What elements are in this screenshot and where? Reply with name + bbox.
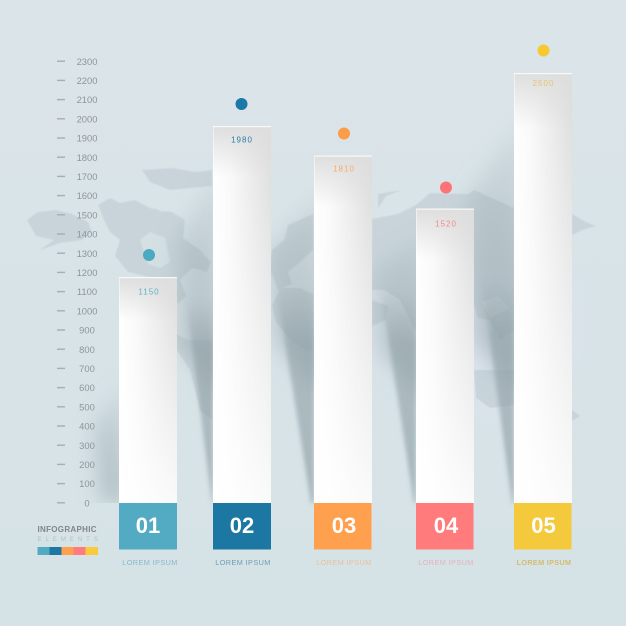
axis scale: 0 [84, 497, 90, 508]
bar 02 [213, 98, 271, 567]
map lakes and highlights [140, 196, 510, 318]
axis scale: 1500 [77, 209, 97, 220]
axis scale: 100 [79, 478, 95, 489]
bar 03 [314, 128, 372, 567]
axis scale: 1100 [77, 286, 97, 297]
axis scale: 700 [79, 363, 95, 374]
axis scale: 200 [79, 459, 95, 470]
bar 01: 1150 [138, 288, 160, 296]
infographic canvas [28, 44, 594, 565]
bar 03: LOREM IPSUM [316, 558, 372, 567]
bar 05: LOREM IPSUM [517, 558, 571, 567]
axis scale: 600 [79, 382, 95, 393]
bar 04: 1520 [435, 220, 457, 228]
bar 05: 05 [531, 513, 556, 538]
bar 05: 2500 [533, 79, 554, 88]
bar 01 [119, 249, 178, 567]
axis scale: 500 [79, 401, 95, 412]
bar 05 [514, 44, 572, 567]
axis scale: 1800 [77, 152, 97, 163]
axis scale: 1200 [77, 267, 97, 278]
axis scale: 1000 [77, 305, 97, 316]
axis scale [57, 56, 97, 508]
bar 03: 1810 [333, 164, 355, 174]
bar 02: 1980 [231, 136, 253, 144]
world map [27, 168, 596, 421]
bar 03: 03 [332, 513, 356, 538]
bar 04 [416, 182, 474, 567]
bar 02: LOREM IPSUM [215, 558, 271, 567]
bar 01: LOREM IPSUM [122, 558, 178, 567]
bar 02: 02 [230, 513, 254, 538]
logo: infographic elements [38, 525, 102, 555]
logo: infographic elements: ELEMENTS [38, 537, 102, 543]
axis scale: 2300 [77, 56, 97, 67]
axis scale: 2100 [77, 94, 97, 105]
axis scale: 900 [79, 325, 95, 336]
axis scale: 2200 [77, 75, 97, 86]
logo: infographic elements: INFOGRAPHIC [38, 525, 97, 534]
bar shadows [92, 120, 524, 503]
bar 01: 01 [136, 513, 160, 538]
axis scale: 300 [79, 440, 95, 451]
axis scale: 2000 [77, 113, 97, 124]
axis scale: 1400 [77, 229, 97, 240]
bar 04: LOREM IPSUM [418, 558, 474, 567]
axis scale: 1600 [77, 190, 97, 201]
bar 04: 04 [434, 513, 459, 538]
axis scale: 1700 [77, 171, 97, 182]
axis scale: 1900 [77, 133, 97, 144]
axis scale: 400 [79, 421, 95, 432]
axis scale: 1300 [77, 248, 97, 259]
axis scale: 800 [79, 344, 95, 355]
